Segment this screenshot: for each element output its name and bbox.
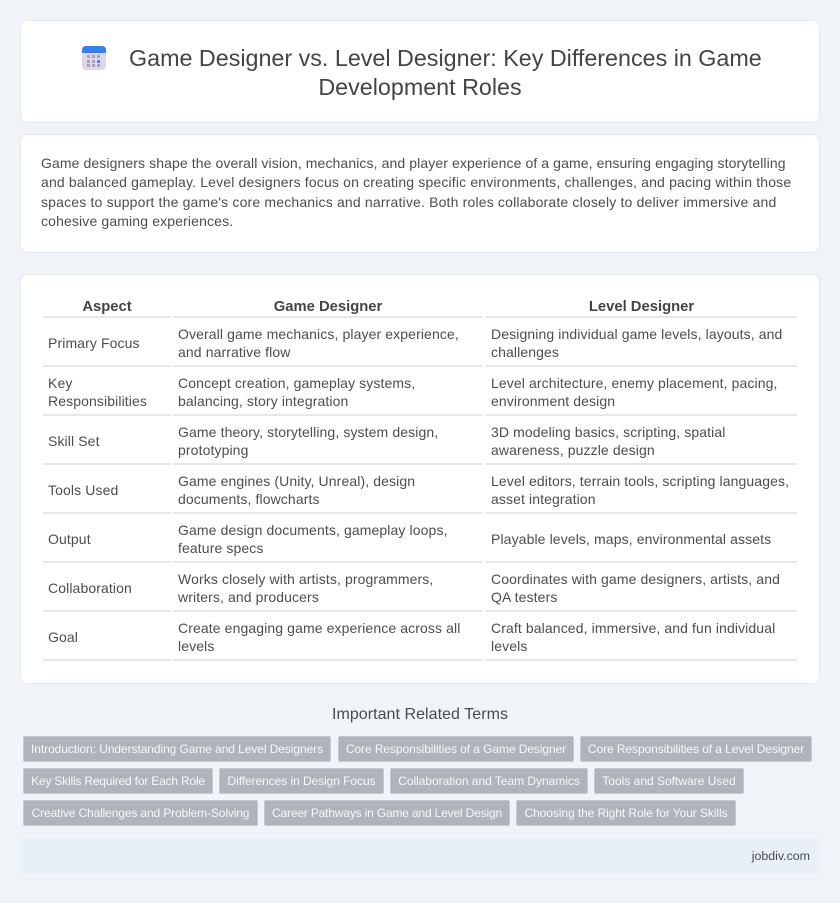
row: primary focus (48, 326, 782, 360)
row: collaboration: Works closely with artists, programmers, (178, 571, 433, 587)
row: goal: Create engaging game experience across all (178, 620, 460, 636)
tag: Creative Challenges and Problem-Solving (32, 806, 249, 820)
row: key responsibilities: balancing, story integration (178, 393, 348, 409)
panel: introduction (20, 134, 820, 253)
footer source text: jobdiv.com (752, 849, 810, 863)
tag: Career Pathways in Game and Level Design (272, 806, 502, 820)
tag (219, 768, 384, 794)
row: goal: levels (491, 638, 527, 654)
intro text: Game designers shape the overall vision, mechanics, and player experience of a game, ensuring engaging storytelling (41, 155, 786, 171)
tag (390, 768, 588, 794)
row: goal: Goal (48, 629, 78, 645)
comparison table (43, 299, 797, 661)
intro text: and balanced gameplay. Level designers focus on creating specific environments, challenges, and pacing within those (41, 174, 791, 190)
row: tools used: documents, flowcharts (178, 491, 320, 507)
tag: Key Skills Required for Each Role (31, 774, 205, 788)
heading: important related terms: Important Related Terms (332, 706, 508, 723)
row: goal: levels (178, 638, 214, 654)
row: tools used: Game engines (Unity, Unreal), design (178, 473, 415, 489)
tag (264, 800, 510, 826)
row: skill set: prototyping (178, 442, 248, 458)
footer bar (20, 839, 820, 873)
row: primary focus: Overall game mechanics, player experience, (178, 326, 459, 342)
tag (23, 768, 213, 794)
row: primary focus: Designing individual game levels, layouts, and (491, 326, 782, 342)
row: collaboration: Coordinates with game designers, artists, and (491, 571, 780, 587)
icon: calendar (82, 46, 106, 70)
row: skill set (48, 424, 726, 458)
row: output: Output (48, 531, 91, 547)
row: output: Playable levels, maps, environmental assets (491, 531, 771, 547)
title: Game Designer vs. Level Designer: Key Differences in Game (129, 45, 762, 71)
intro text (41, 155, 791, 229)
tag: Collaboration and Team Dynamics (398, 774, 580, 788)
header: game designer: Game Designer (274, 299, 382, 315)
tag (516, 800, 736, 826)
row: collaboration: QA testers (491, 589, 557, 605)
header: aspect: Aspect (82, 299, 132, 315)
tag (23, 800, 258, 826)
row: collaboration: writers, and producers (178, 589, 319, 605)
row: key responsibilities: Concept creation, gameplay systems, (178, 375, 415, 391)
intro text: spaces to support the game's core mechanics and narrative. Both roles collaborate closely to deliver immersive and (41, 194, 776, 210)
row: tools used: Level editors, terrain tools, scripting languages, (491, 473, 789, 489)
tag: Core Responsibilities of a Level Designer (588, 742, 804, 756)
header: level designer: Level Designer (589, 299, 694, 315)
tag: Introduction: Understanding Game and Level Designers (31, 742, 323, 756)
row: tools used: Tools Used (48, 482, 118, 498)
row: key responsibilities: environment design (491, 393, 615, 409)
panel: comparison table (20, 274, 820, 684)
row: output: feature specs (178, 540, 263, 556)
tag: Tools and Software Used (602, 774, 736, 788)
tag (594, 768, 744, 794)
row: primary focus: challenges (491, 344, 559, 360)
row: goal: Craft balanced, immersive, and fun individual (491, 620, 775, 636)
tag (23, 736, 331, 762)
row: tools used: asset integration (491, 491, 596, 507)
row: skill set: 3D modeling basics, scripting, spatial (491, 424, 726, 440)
row: key responsibilities: Key (48, 375, 72, 391)
row: key responsibilities: Level architecture, enemy placement, pacing, (491, 375, 778, 391)
tag: Choosing the Right Role for Your Skills (524, 806, 728, 820)
panel: title header (20, 20, 820, 123)
row: output: Game design documents, gameplay loops, (178, 522, 448, 538)
title (129, 45, 762, 100)
intro text: cohesive gaming experiences. (41, 213, 233, 229)
row: primary focus: and narrative flow (178, 344, 290, 360)
row: primary focus: Primary Focus (48, 335, 140, 351)
row: skill set: Skill Set (48, 433, 100, 449)
row: skill set: Game theory, storytelling, system design, (178, 424, 438, 440)
tag (580, 736, 812, 762)
tag: Differences in Design Focus (228, 774, 375, 788)
related term tags (23, 736, 812, 826)
row: collaboration: Collaboration (48, 580, 132, 596)
row: skill set: awareness, puzzle design (491, 442, 655, 458)
tag (338, 736, 574, 762)
row: key responsibilities: Responsibilities (48, 393, 147, 409)
row: tools used (48, 473, 789, 507)
row: goal (48, 620, 775, 654)
title: Development Roles (318, 74, 522, 100)
row: key responsibilities (48, 375, 778, 409)
row: collaboration (48, 571, 780, 605)
tag: Core Responsibilities of a Game Designer (346, 742, 566, 756)
row: output (48, 522, 771, 556)
